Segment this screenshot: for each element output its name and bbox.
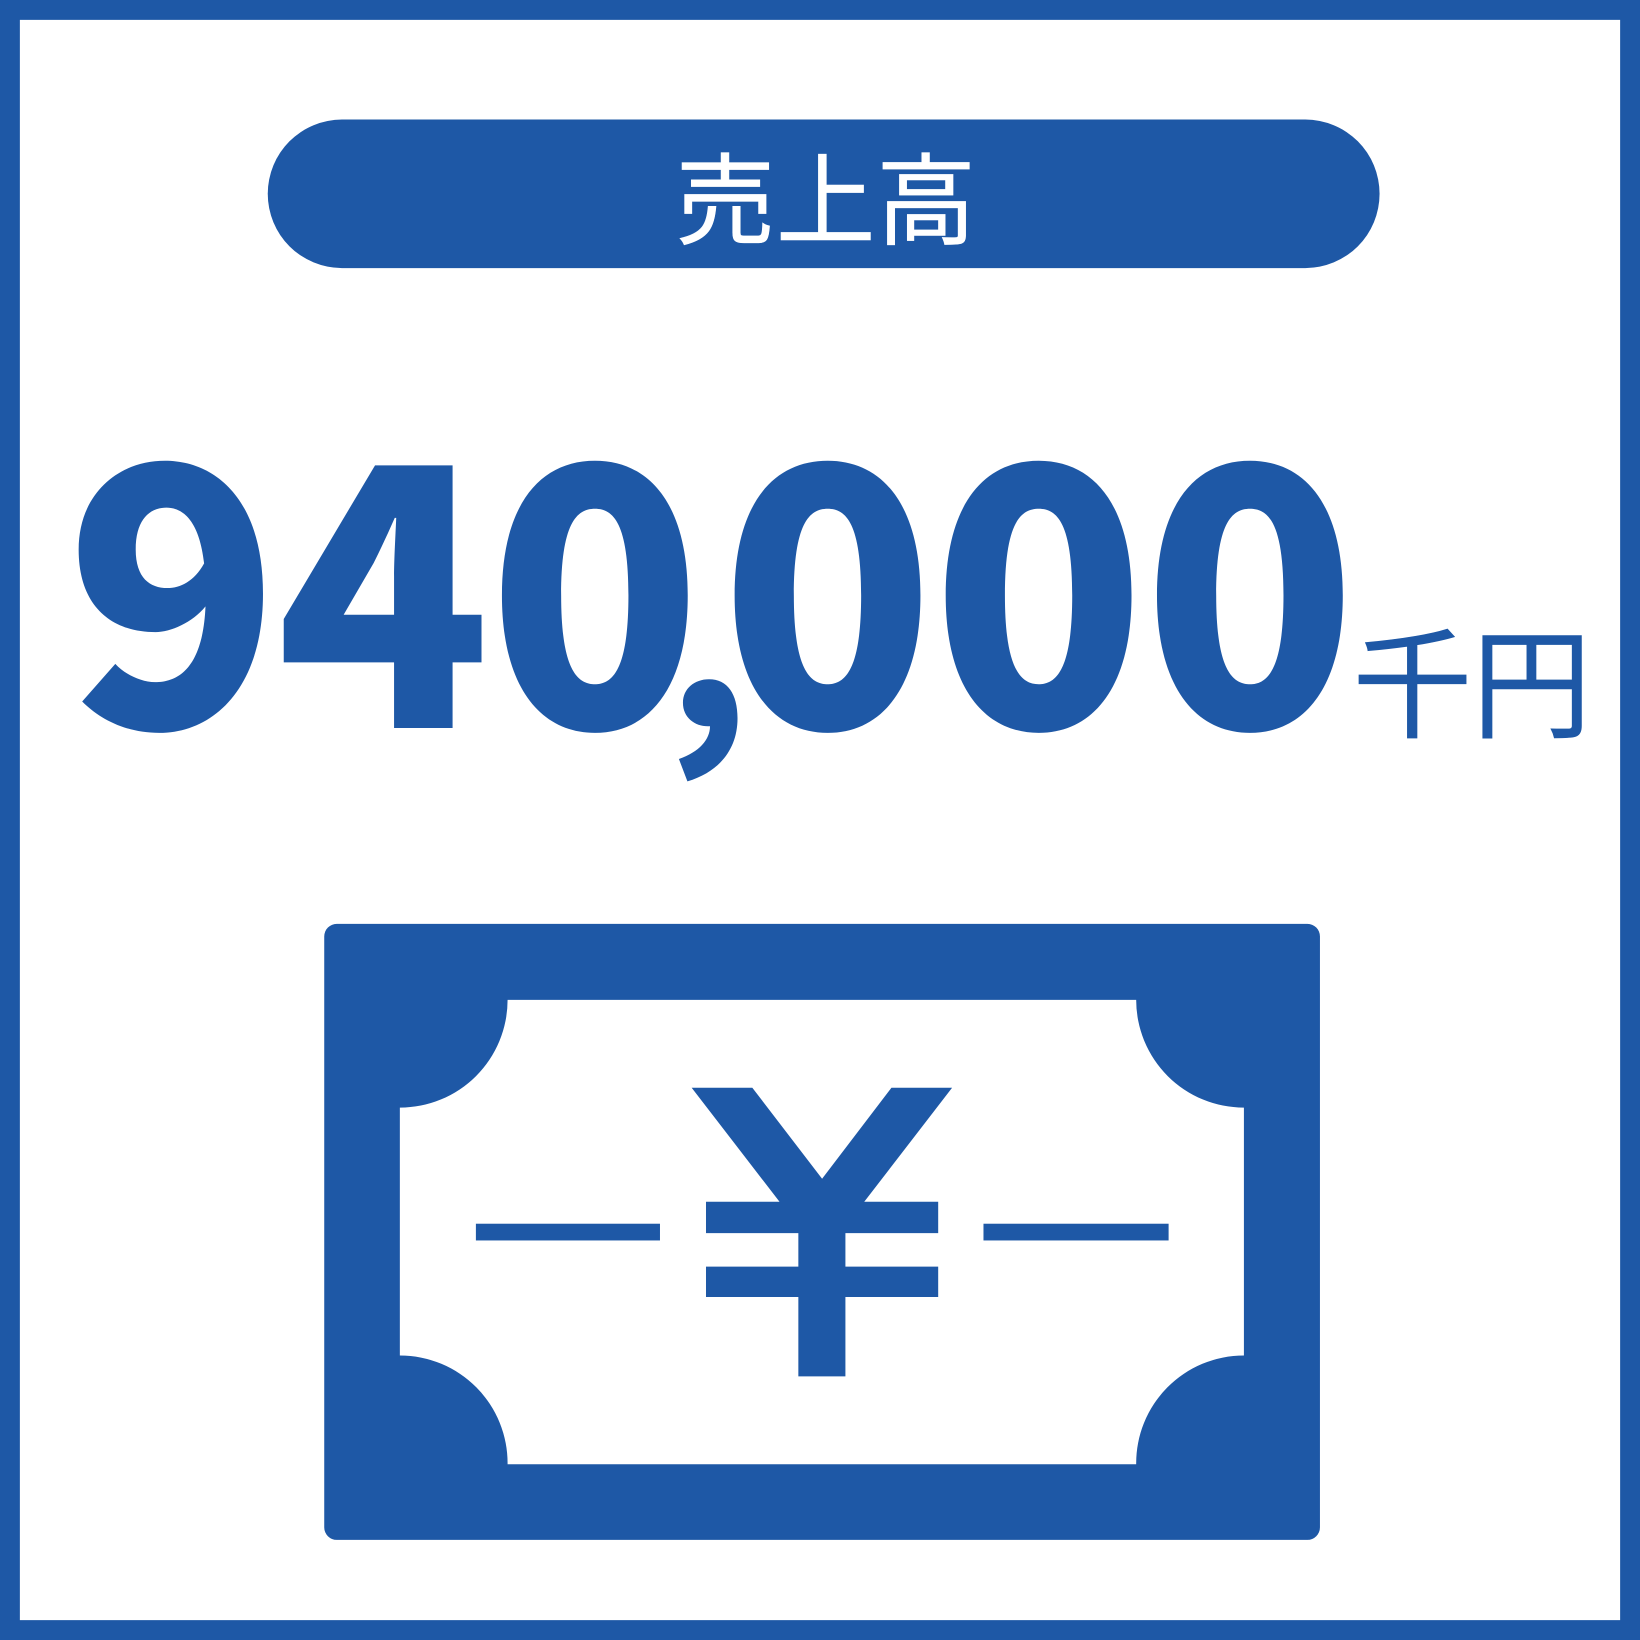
sales figure: 4	[276, 319, 491, 830]
sales figure: 0	[720, 319, 935, 830]
heading text: 売上高	[676, 147, 977, 258]
sales figure: ,	[666, 455, 749, 796]
right dash	[983, 1224, 1169, 1240]
heading pill	[268, 120, 1380, 268]
sales figure	[65, 319, 1357, 830]
sales figure: 0	[931, 319, 1146, 830]
sales figure: 0	[487, 319, 702, 830]
banknote inner panel	[400, 1000, 1244, 1464]
icon: yen sign	[692, 1088, 952, 1376]
unit label: 千円	[1353, 621, 1591, 754]
left dash	[476, 1224, 660, 1240]
icon: yen banknote	[324, 924, 1320, 1540]
banknote body	[324, 924, 1320, 1540]
sales figure: 0	[1143, 319, 1357, 830]
sales figure: 9	[65, 319, 280, 830]
